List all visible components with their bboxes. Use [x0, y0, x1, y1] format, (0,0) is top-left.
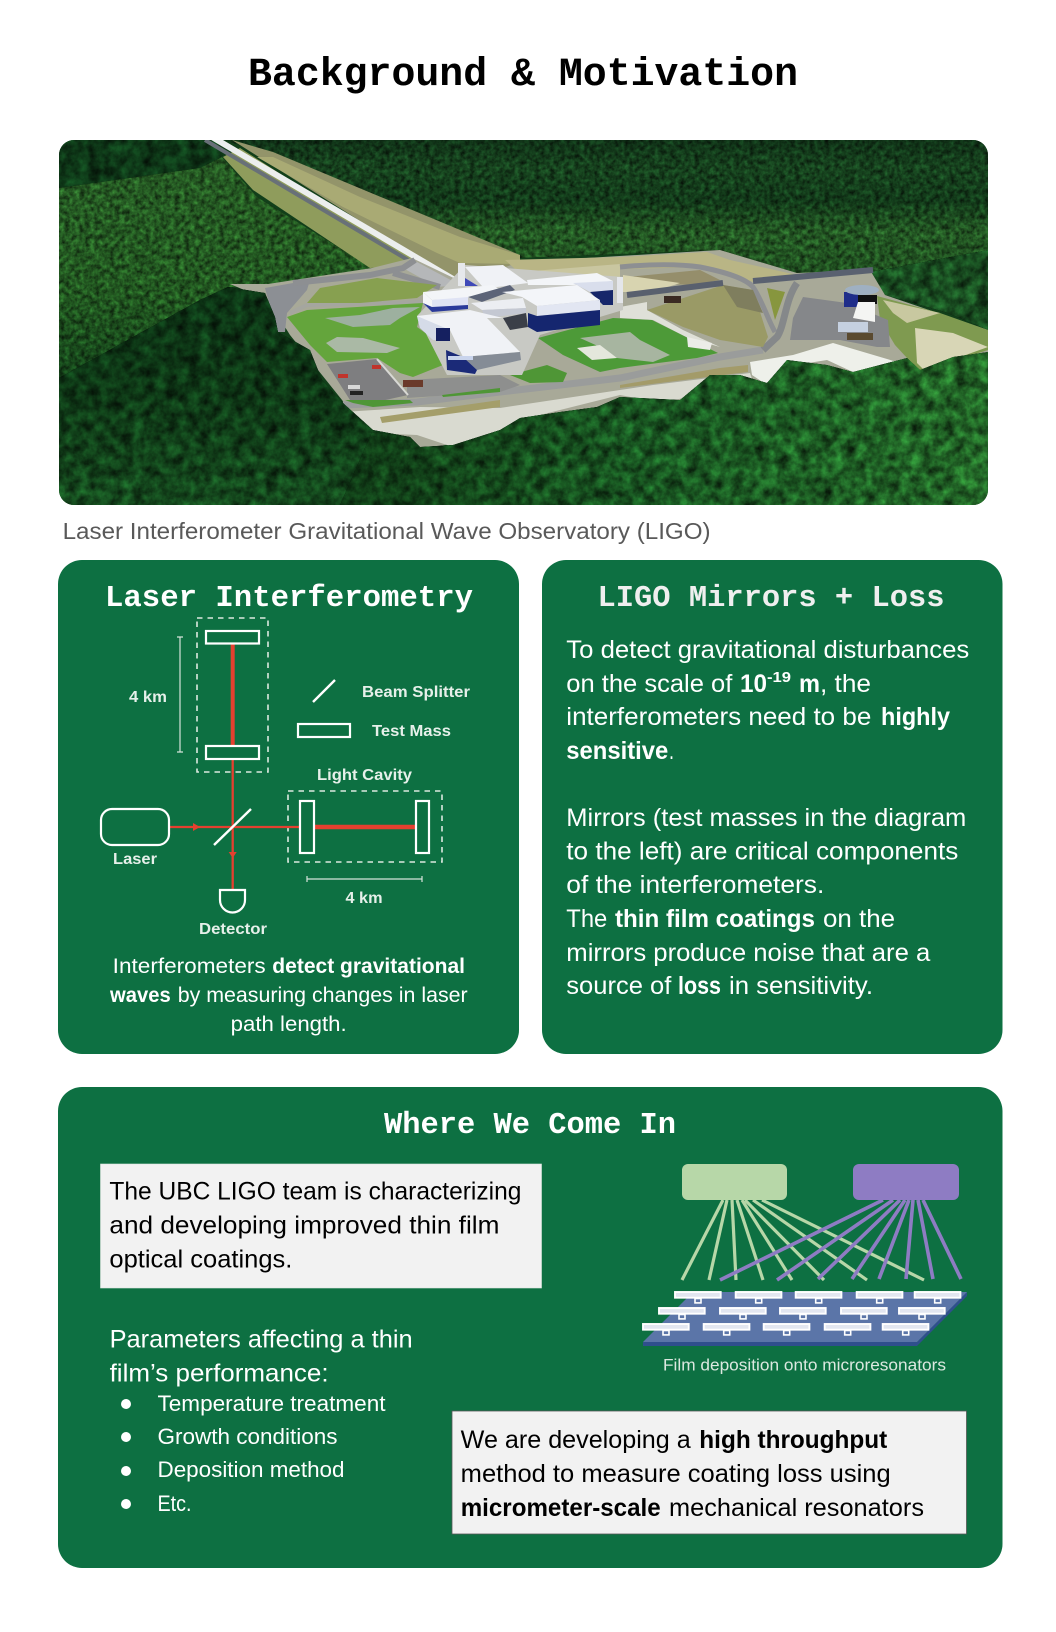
- callout: high throughput method: method to measure coating loss using: [461, 1460, 891, 1488]
- top-left dark forest: [59, 140, 226, 191]
- description text: path length.: [231, 1012, 347, 1036]
- heading: LIGO Mirrors + Loss: LIGO Mirrors + Loss: [598, 582, 944, 616]
- pine forest on the left: [59, 157, 372, 378]
- callout: high throughput method: [452, 1411, 966, 1534]
- detector: [220, 890, 245, 912]
- callout: high throughput method: We are developing a: [461, 1426, 691, 1454]
- callout: high throughput method: high throughput: [699, 1426, 888, 1454]
- paragraph: sensitivity: m: [799, 670, 820, 698]
- white gravel pile: [750, 343, 897, 385]
- diagram: interferometer schematic: [101, 618, 442, 912]
- paragraph: mirrors and thin film coatings: Mirrors (test masses in the diagram: [566, 804, 966, 832]
- bullet list: parameters: Deposition method: [158, 1457, 344, 1482]
- text: parameters heading: [110, 1326, 413, 1388]
- panel: LIGO Mirrors + Loss: [542, 560, 1002, 1054]
- panel: Where We Come In: [58, 1087, 1002, 1568]
- laser beams: [169, 643, 416, 890]
- text: parameters heading: film’s performance:: [110, 1360, 329, 1388]
- bullet list: parameters: Temperature treatment: [158, 1391, 386, 1416]
- east field and arm: [623, 270, 873, 350]
- paragraph: mirrors and thin film coatings: to the left) are critical components: [566, 838, 958, 866]
- callout: high throughput method: mechanical resonators: [669, 1494, 924, 1522]
- east lawn and pond: [510, 302, 720, 383]
- heading: Where We Come In: Where We Come In: [384, 1109, 676, 1143]
- paragraph: mirrors and thin film coatings: on the: [823, 905, 895, 933]
- callout: high throughput method: micrometer-scale: [461, 1494, 661, 1522]
- olive verge beside the canal: [232, 140, 520, 284]
- interferometer north arm: [205, 137, 458, 282]
- beam arrows: [193, 823, 237, 858]
- diagram labels: [113, 684, 470, 938]
- paragraph: sensitivity: 10: [740, 670, 767, 698]
- bullet list: parameters: Growth conditions: [158, 1424, 338, 1449]
- source: purple material: [853, 1164, 959, 1200]
- callout: UBC LIGO team: optical coatings.: [109, 1246, 292, 1274]
- distant forest behind the site: [226, 140, 988, 273]
- west lawn: [307, 278, 437, 303]
- sand band behind the site: [505, 252, 797, 282]
- callout: UBC LIGO team: and developing improved thin film: [109, 1212, 499, 1240]
- diagram labels: Light Cavity: [317, 767, 412, 784]
- small strips of lawn south of the lot: [345, 388, 500, 407]
- paragraph: mirrors and thin film coatings: of the interferometers.: [566, 871, 824, 899]
- source: green material: [682, 1164, 787, 1200]
- paragraph: sensitivity: [566, 636, 969, 765]
- test masses: [206, 631, 429, 853]
- description text: Interferometers: [113, 954, 266, 978]
- callout: UBC LIGO team: The UBC LIGO team is characterizing: [109, 1178, 521, 1206]
- paragraph: sensitivity: -19: [767, 669, 791, 686]
- scale bars: [177, 637, 422, 882]
- paragraph: sensitivity: , the: [820, 670, 871, 698]
- laser source: [101, 809, 169, 845]
- paragraph: sensitivity: interferometers need to be: [566, 703, 871, 731]
- light cavities (dashed): [197, 618, 442, 862]
- canal beside the arm: [257, 157, 520, 264]
- photo caption: Laser Interferometer Gravitational Wave Observatory (LIGO): [63, 518, 711, 544]
- description text: detect gravitational: [272, 954, 465, 978]
- roads and west lot: [265, 260, 797, 405]
- paragraph: sensitivity: sensitive: [566, 737, 668, 765]
- text: parameters heading: Parameters affecting a thin: [110, 1326, 413, 1354]
- site ground: [230, 250, 988, 450]
- purple deposition rays: [720, 1200, 961, 1280]
- east station: [790, 285, 890, 347]
- paragraph: mirrors and thin film coatings: The: [566, 905, 607, 933]
- paragraph: mirrors and thin film coatings: [566, 804, 966, 1000]
- beam splitters: [214, 680, 335, 845]
- paragraph: sensitivity: To detect gravitational disturbances: [566, 636, 969, 664]
- description text: waves: [109, 983, 171, 1007]
- diagram caption: Film deposition onto microresonators: [663, 1357, 946, 1375]
- parking lot with cars: [327, 359, 423, 403]
- paragraph: sensitivity: .: [669, 737, 674, 765]
- east sand and grass: [877, 296, 988, 373]
- diagram labels: 4 km: [346, 890, 382, 907]
- grass strip along the arm: [223, 148, 412, 268]
- callout: UBC LIGO team: [100, 1164, 542, 1288]
- substrate plate: [643, 1292, 967, 1346]
- paragraph: sensitivity: highly: [881, 703, 950, 731]
- diagram: film deposition onto microresonators: [643, 1164, 967, 1375]
- photo: aerial view of LIGO observatory: [59, 137, 988, 505]
- paragraph: mirrors and thin film coatings: thin film coatings: [615, 905, 815, 933]
- paragraph: sensitivity: on the scale of: [566, 670, 732, 698]
- green deposition rays: [682, 1200, 924, 1280]
- east tree line: [870, 250, 988, 330]
- diagram labels: 4 km: [129, 689, 167, 706]
- paragraph: mirrors and thin film coatings: in sensitivity.: [729, 972, 873, 1000]
- foreground tree line: [340, 352, 988, 505]
- description text: [109, 954, 468, 1036]
- diagram labels: Beam Splitter: [362, 684, 470, 701]
- main lawn and ponds: [287, 303, 453, 377]
- foreground sand and olive strips: [343, 365, 753, 447]
- heading: Laser Interferometry: Laser Interferometry: [105, 582, 473, 616]
- paragraph: mirrors and thin film coatings: loss: [678, 972, 721, 1000]
- diagram labels: Detector: [199, 921, 267, 938]
- paragraph: mirrors and thin film coatings: source of: [566, 972, 671, 1000]
- paragraph: mirrors and thin film coatings: mirrors produce noise that are a: [566, 939, 930, 967]
- bullet list: parameters: [121, 1391, 386, 1516]
- diagram labels: Laser: [113, 851, 157, 868]
- main laboratory buildings: [417, 263, 623, 375]
- lower-left dark forest: [59, 287, 410, 505]
- description text: by measuring changes in laser: [178, 983, 468, 1007]
- bullet list: parameters: Etc.: [158, 1491, 192, 1516]
- title: Background & Motivation: [248, 53, 798, 98]
- panel: Laser Interferometry: [58, 560, 519, 1054]
- diagram labels: Test Mass: [372, 723, 451, 740]
- microresonators: [643, 1292, 960, 1335]
